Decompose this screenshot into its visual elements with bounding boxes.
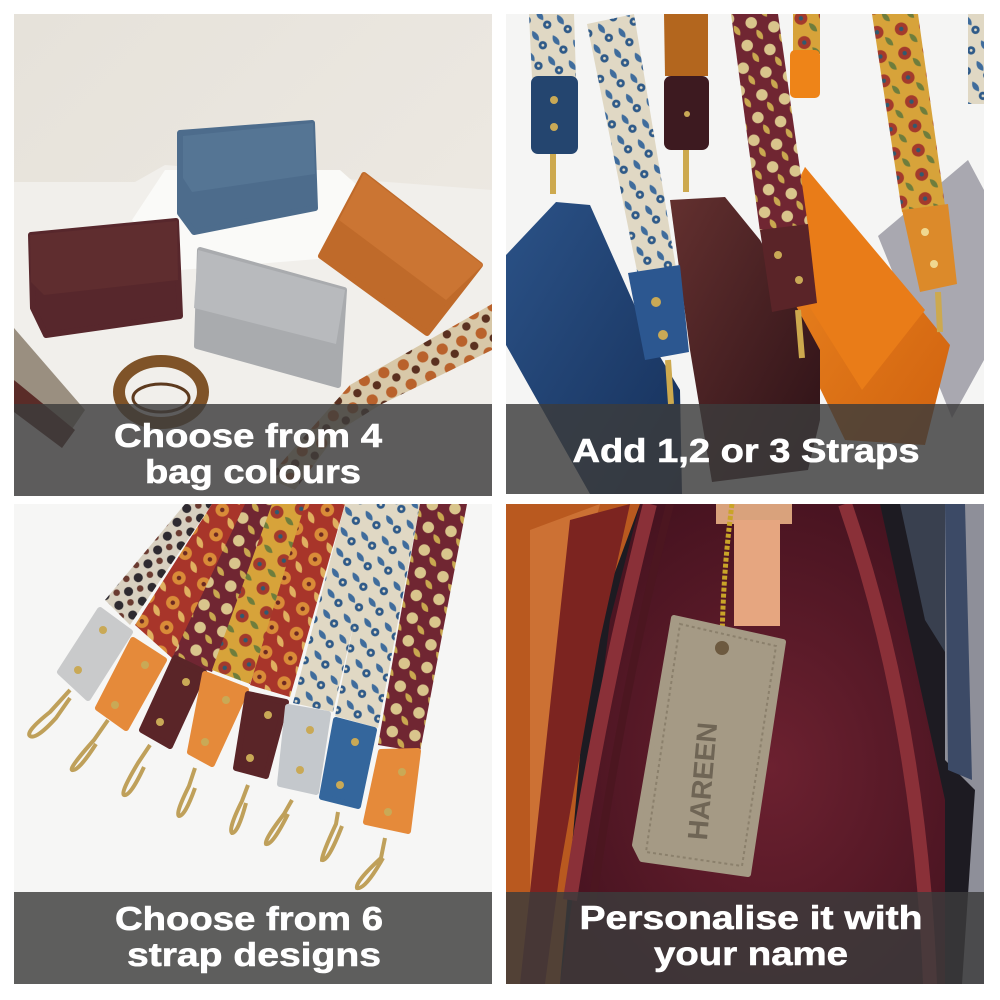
icon: side fabric [900,504,984,984]
icon: navy bag [506,202,682,494]
caption band: personalise: your name [654,935,848,972]
caption band: bag colours: Choose from 4 [114,417,383,454]
icon: strap right [268,304,492,490]
caption band: straps [506,404,984,494]
icon: bag interior [560,504,945,984]
panel: straps [506,14,984,494]
icon: strap left [14,328,85,448]
caption band: bag colours [14,404,492,496]
caption band: straps: Add 1,2 or 3 Straps [572,432,920,469]
icon: grey bag back [878,160,984,418]
caption band: personalise [506,892,984,984]
icon: orange bag [321,173,483,333]
panel: strap designs [14,504,492,892]
panel: bag colours [14,14,492,496]
straps fan [105,504,467,752]
icon: leather name tag: HAREEN [682,721,723,841]
icon: coiled strap [119,361,203,423]
icon: grey bag [194,250,345,385]
icon: clasp and ribbon [716,504,792,626]
straps [529,14,984,404]
icon: wine bag [670,197,820,482]
icon: orange pocket [506,504,640,984]
caption band: strap designs [14,892,492,984]
icon: leather name tag [635,618,783,874]
caption band: strap designs: strap designs [127,936,381,973]
icon: orange bag [796,167,950,445]
panel: personalise [506,504,984,984]
caption band: strap designs: Choose from 6 [115,900,383,937]
caption band: personalise: Personalise it with [580,899,922,936]
caption band: bag colours: bag colours [145,453,361,490]
strap tabs and clasps [29,610,418,888]
icon: blue bag [180,123,315,232]
icon: maroon bag [30,221,180,335]
